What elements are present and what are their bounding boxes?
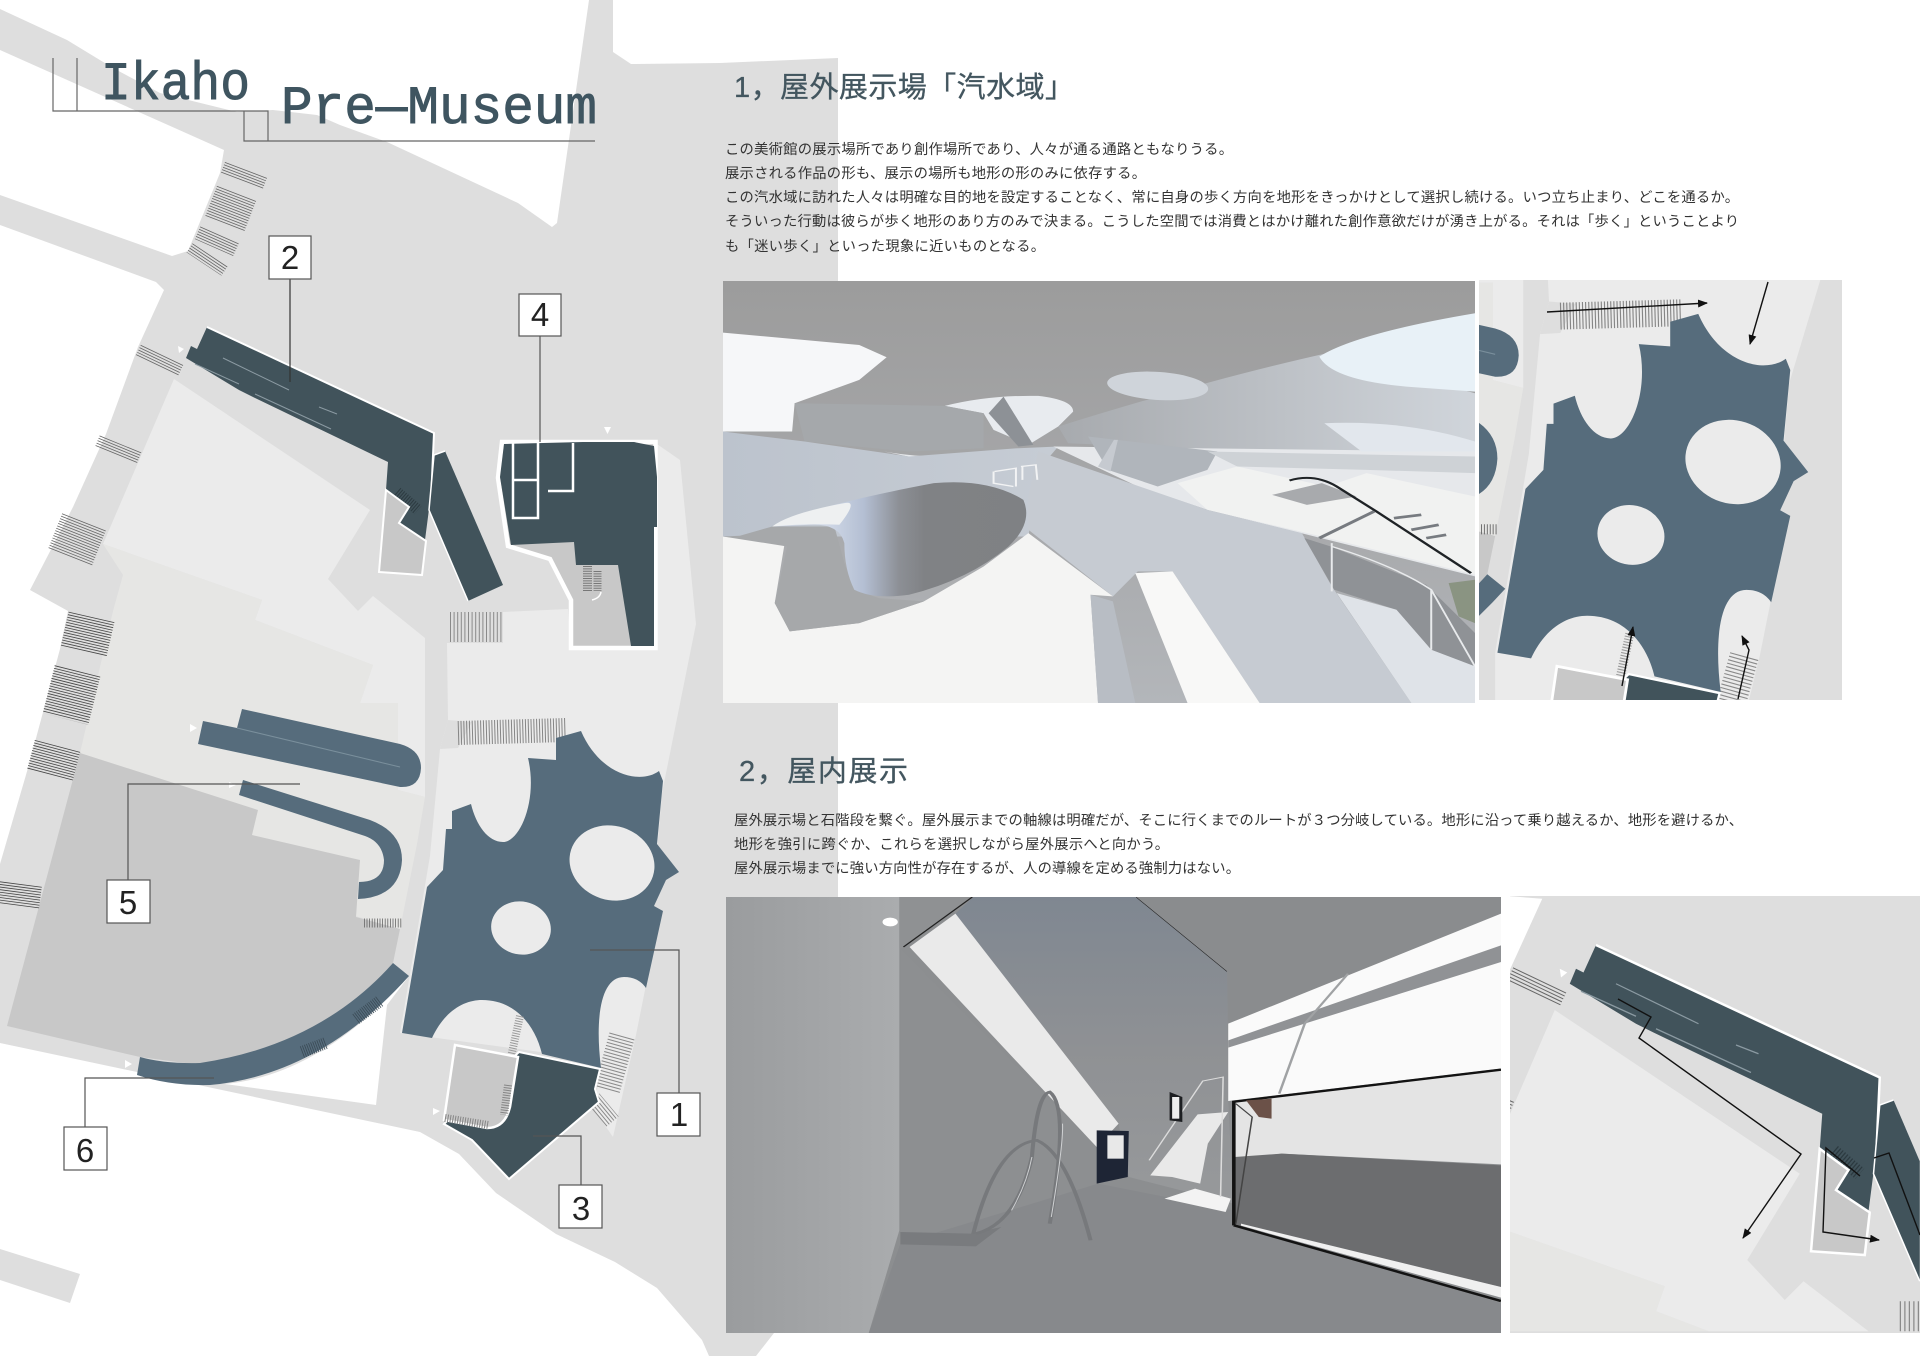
site plan: [0, 0, 838, 1356]
building 1: outdoor exhibition with openings: [402, 731, 679, 1068]
heading: section 2: 2，屋内展示: [739, 755, 908, 788]
text block: section 1 description: [725, 141, 1739, 255]
label 4: [519, 294, 561, 442]
heading: section 1: 1，屋外展示場「汽水域」: [734, 71, 1074, 104]
building 6: arc gallery: [137, 963, 409, 1085]
building 2: side wing: [429, 451, 503, 601]
building 3: south block: [444, 1045, 600, 1179]
entrance markers: [125, 346, 611, 1115]
plaza: upper light terrace: [103, 379, 425, 797]
building 2: long gallery: [186, 327, 434, 575]
text block: section 1 description: そういった行動は彼らが歩く地形のあり方のみで決まる。こうした空間では消費とはかけ離れた創作意欲だけが湧き上がる。それは「歩く」ということより: [725, 213, 1739, 230]
text block: section 1 description: この汽水域に訪れた人々は明確な目的地を設定することなく、常に自身の歩く方向を地形をきっかけとして選択し続ける。いつ立ち止まり、どこを通るか。: [725, 189, 1739, 206]
white pocket below the arc: [225, 976, 409, 1105]
plan thumbnail: outdoor exhibition: [1479, 280, 1842, 700]
label 6: [64, 1078, 214, 1170]
label 1: 1: [670, 1096, 688, 1133]
label 5: 5: [119, 884, 137, 921]
text block: section 1 description: も「迷い歩く」といった現象に近いものとなる。: [725, 238, 1045, 255]
text block: section 1 description: 展示される作品の形も、展示の場所も地形の形のみに依存する。: [725, 165, 1146, 182]
label 3: 3: [572, 1190, 590, 1227]
label 6: 6: [76, 1132, 94, 1169]
render: indoor exhibition hall: [726, 897, 1501, 1333]
text block: section 2 description: [734, 812, 1743, 877]
plaza: lower terrace: [7, 753, 400, 1065]
terrain: roads and ground: [0, 0, 838, 1356]
plan thumbnail: gallery routes: [1510, 896, 1920, 1333]
text block: section 2 description: 屋外展示場までに強い方向性が存在するが、人の導線を定める強制力はない。: [734, 860, 1240, 877]
text block: section 2 description: 地形を強引に跨ぐか、これらを選択しながら屋外展示へと向かう。: [734, 836, 1169, 853]
lower stairs: [17, 617, 622, 1115]
label 3: [533, 1136, 602, 1228]
building 5: curved gallery: [239, 780, 402, 899]
label 1: [590, 950, 700, 1136]
label 4: 4: [531, 296, 549, 333]
text block: section 1 description: この美術館の展示場所であり創作場所であり、人々が通る通路ともなりうる。: [725, 141, 1233, 158]
plaza: middle terrace: [80, 544, 425, 929]
terrain: small road fragment: [0, 1249, 80, 1303]
title: [53, 55, 597, 141]
arrows on gallery plan: [1618, 999, 1920, 1240]
label 5: [107, 784, 300, 923]
title: Pre—Museum: [281, 79, 597, 140]
building 5: long pill gallery: [198, 709, 421, 787]
label 2: [269, 236, 311, 382]
plaza: east exhibition ground: [400, 442, 696, 1137]
title: Ikaho: [101, 55, 250, 116]
arrows on outdoor plan: [1547, 282, 1768, 699]
building 4: upper block: [498, 442, 657, 648]
label 2: 2: [281, 239, 299, 276]
upper-west stairs: [70, 170, 246, 558]
text block: section 2 description: 屋外展示場と石階段を繋ぐ。屋外展示までの軸線は明確だが、そこに行くまでのルートが３つ分岐している。地形に沿って乗り越えるか、地形を避けるか、: [734, 812, 1743, 829]
render: outdoor exhibition space: [723, 281, 1475, 703]
